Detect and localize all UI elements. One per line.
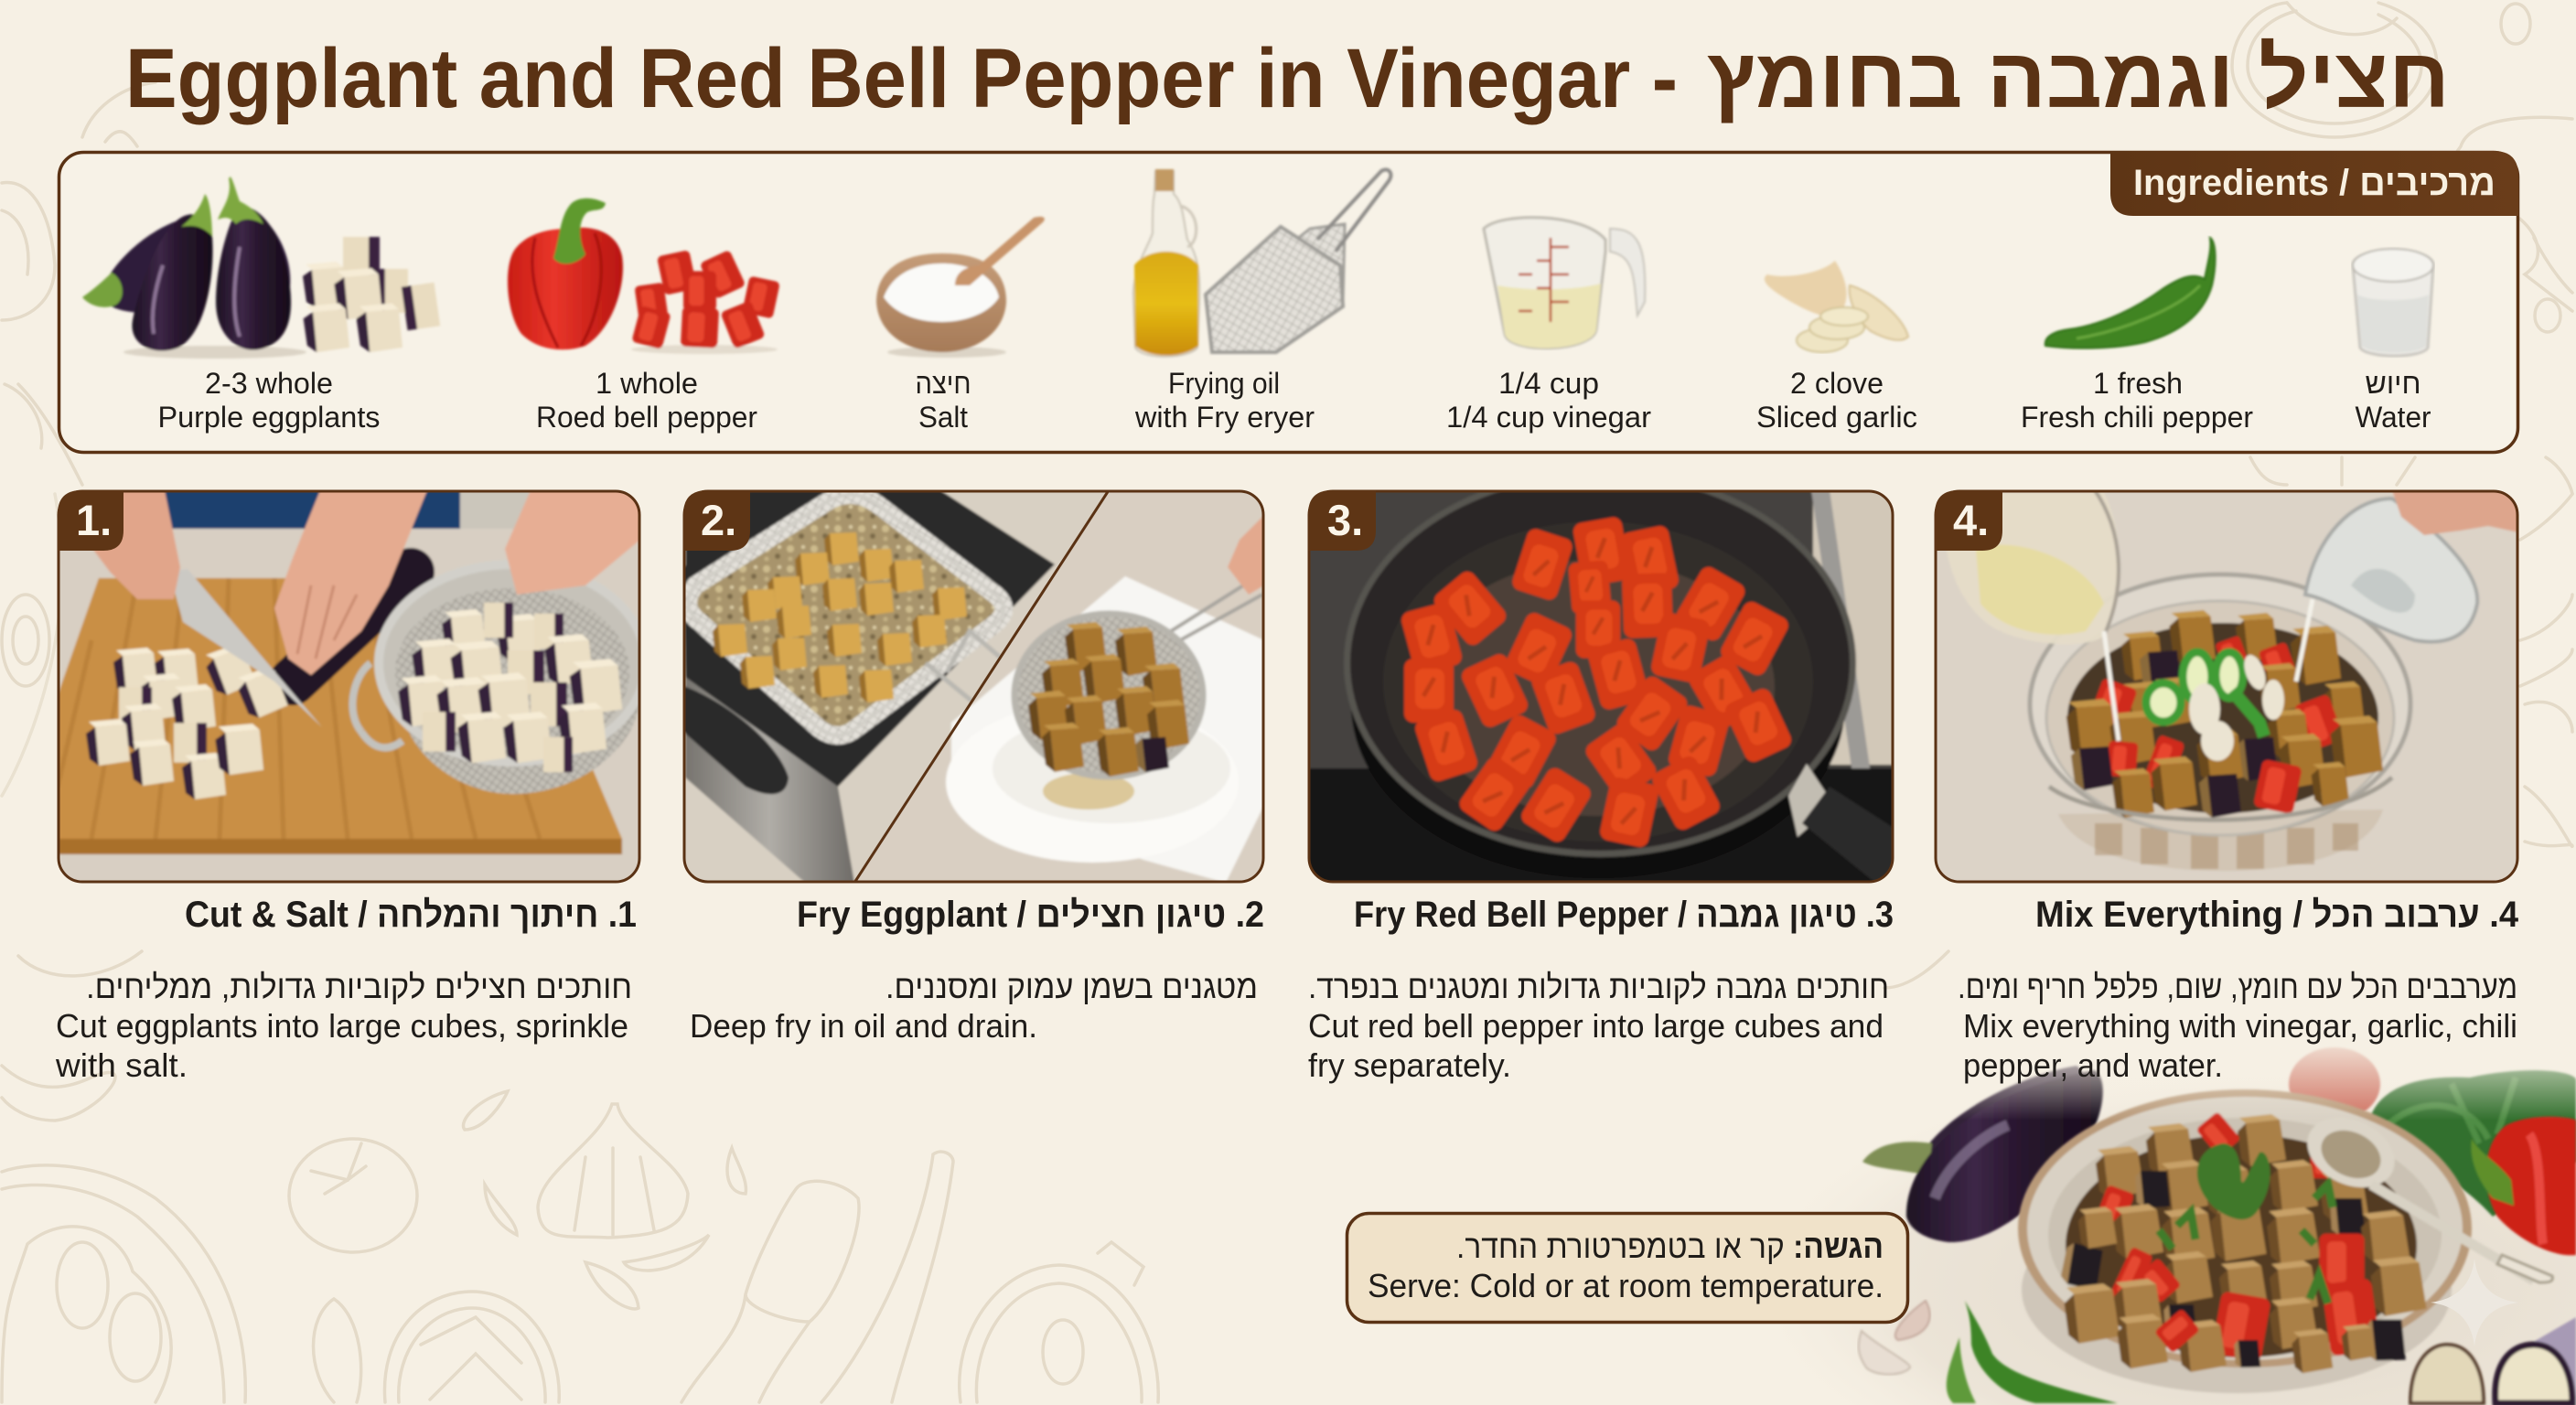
hero background shadow [1738,1034,2576,1405]
step 2 number badge [683,490,750,551]
ingredient label: eggplants: Purple eggplants [157,401,381,434]
ingredient: frying oil and fry basket [1133,169,1390,357]
step 3 number badge [1308,490,1376,551]
panel: step 2 photo [683,490,1264,883]
ingredient: eggplants [82,177,440,359]
ingredient label: bell pepper: 1 whole [596,367,698,400]
ingredient label: vinegar [1446,367,1651,434]
step 3 description: fry separately. [1308,1046,1511,1084]
step 1 heading: 1. חיתוך והמלחה / Cut & Salt [185,895,637,935]
ingredient: water glass [2353,249,2433,356]
ingredient: salt [876,217,1045,358]
step 3 heading: 3. טיגון גמבה / Fry Red Bell Pepper [1354,895,1894,935]
hero green chilies [1947,1301,2118,1403]
step 4 description: pepper, and water. [1963,1046,2223,1084]
step 4 description [1958,968,2517,1084]
step 1 description: Cut eggplants into large cubes, sprinkle [56,1007,628,1045]
step 2 number badge: 2. [701,496,736,544]
step 3 description: Cut red bell pepper into large cubes and [1308,1007,1884,1045]
ingredient: garlic [1765,261,1908,352]
ingredient label: water: חיוש [2366,367,2420,400]
ingredient label: chili: Fresh chili pepper [2021,401,2253,434]
ingredient label: water: Water [2355,401,2431,434]
step 1 number badge: 1. [76,496,112,544]
ingredient label: salt: Salt [918,401,968,434]
hero bowl [2018,1089,2552,1393]
ingredient label: garlic: 2 clove [1790,367,1884,400]
step 4 number badge [1935,490,2002,551]
ingredient label: frying oil: Frying oil [1168,367,1280,400]
hero eggplants [1862,1066,2103,1242]
serving callout: Serve: Cold or at room temperature. [1368,1267,1884,1304]
panel: ingredients [59,151,2518,452]
hero spoon [2296,1104,2552,1282]
step 3 number badge: 3. [1327,496,1363,544]
ingredient label: bell pepper [536,367,757,434]
panel: step 4 photo [1935,490,2518,883]
ingredient label: eggplants [157,367,381,434]
ingredient: vinegar measuring cup [1484,218,1645,349]
ingredient label: frying oil: with Fry eryer [1134,401,1315,434]
step 2 description: מטגנים בשמן עמוק ומסננים. [886,968,1258,1005]
hero sliced eggplant [2410,1317,2576,1403]
ingredients tab: מרכיבים / Ingredients [2133,163,2496,203]
ingredient label: bell pepper: Roed bell pepper [536,401,757,434]
step 1 number badge [58,490,123,551]
serving callout [1347,1213,1908,1323]
title: Eggplant and Red Bell Pepper in Vinegar - [125,32,1678,125]
ingredient label: garlic: Sliced garlic [1756,401,1917,434]
hero dish illustration [1859,1047,2576,1403]
step 2 description: Deep fry in oil and drain. [690,1007,1037,1045]
ingredients tab [2110,151,2518,216]
ingredient label: salt [915,367,971,434]
ingredient label: chili [2021,367,2253,434]
step 2 description [690,968,1258,1045]
ingredient label: vinegar: 1/4 cup vinegar [1446,401,1651,434]
hero red pepper [2471,1117,2576,1255]
step 1 description [55,968,632,1084]
hero food cubes [2058,1111,2427,1373]
step 4 number badge: 4. [1953,496,1989,544]
hero parsley and tomato [2289,1047,2576,1217]
panel: step 3 photo [1308,469,1894,883]
ingredient label: garlic [1756,367,1917,434]
sparkle mark [2431,1259,2518,1346]
ingredient: red bell pepper [508,198,780,354]
step 3 description: חותכים גמבה לקוביות גדולות ומטגנים בנפרד. [1308,968,1889,1005]
serving callout: הגשה: קר או בטמפרטורת החדר. [1456,1228,1884,1265]
panel: step 1 photo [58,490,646,883]
ingredient: chili pepper [2045,238,2216,349]
ingredient label: chili: 1 fresh [2093,367,2183,400]
hero top fade [1888,1034,2576,1121]
step 3 description [1308,968,1889,1084]
title: חציל וגמבה בחומץ [1707,32,2450,125]
hero garlic [1859,1301,1930,1374]
step 1 description: with salt. [55,1046,188,1084]
ingredient label: water [2355,367,2431,434]
ingredient label: eggplants: 2-3 whole [205,367,333,400]
step 4 description: Mix everything with vinegar, garlic, chili [1963,1007,2517,1045]
step 4 heading: 4. ערבוב הכל / Mix Everything [2035,895,2519,935]
ingredient label: salt: חיצה [915,367,971,400]
step 2 heading: 2. טיגון חצילים / Fry Eggplant [797,895,1264,935]
ingredient label: vinegar: 1/4 cup [1498,367,1599,400]
ingredient label: frying oil [1134,367,1315,434]
step 1 description: חותכים חצילים לקוביות גדולות, ממליחים. [86,968,632,1005]
